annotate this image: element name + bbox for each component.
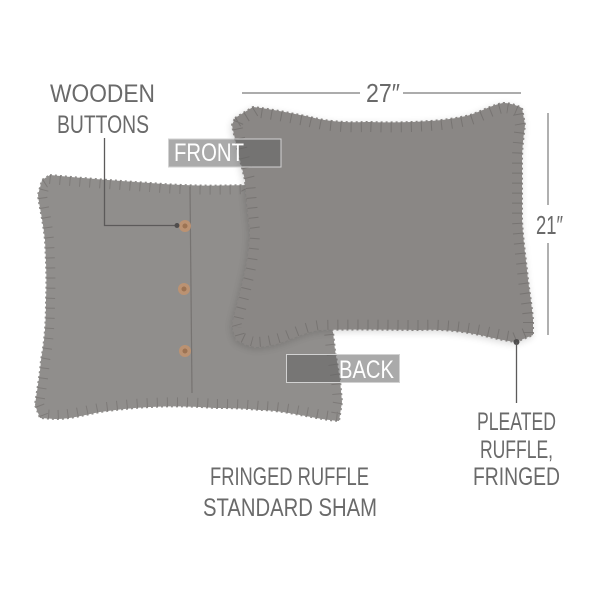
callout: wooden buttons: BUTTONS bbox=[57, 111, 149, 139]
callout: pleated ruffle, fringed: PLEATED bbox=[477, 408, 556, 436]
product title: STANDARD SHAM bbox=[203, 494, 377, 522]
callout: pleated ruffle, fringed bbox=[473, 339, 560, 491]
icon: wooden button middle bbox=[178, 283, 190, 295]
callout: pleated ruffle, fringed: RUFFLE, bbox=[480, 436, 553, 464]
dimension: height 21 inches: 21″ bbox=[536, 210, 563, 240]
product title: FRINGED RUFFLE bbox=[210, 463, 369, 491]
ruffle pleats: front bbox=[232, 103, 533, 347]
label: BACK: BACK bbox=[339, 356, 394, 384]
panel: front of pillow sham bbox=[231, 103, 533, 349]
product title bbox=[203, 463, 377, 522]
callout: wooden buttons: WOODEN bbox=[50, 80, 155, 108]
callout: wooden buttons bbox=[50, 80, 180, 228]
callout: pleated ruffle, fringed: FRINGED bbox=[473, 463, 560, 491]
panel: back of pillow sham bbox=[35, 175, 342, 421]
ruffle pleats: back bbox=[35, 175, 342, 421]
icon: wooden button bottom bbox=[179, 345, 191, 357]
label: FRONT: FRONT bbox=[174, 139, 244, 167]
center placket seam bbox=[190, 187, 192, 393]
infographic: pillow sham dimensions bbox=[34, 84, 563, 516]
icon: wooden button top bbox=[179, 220, 191, 232]
label: BACK bbox=[286, 354, 400, 384]
dimension: width 27 inches: 27″ bbox=[366, 78, 400, 108]
